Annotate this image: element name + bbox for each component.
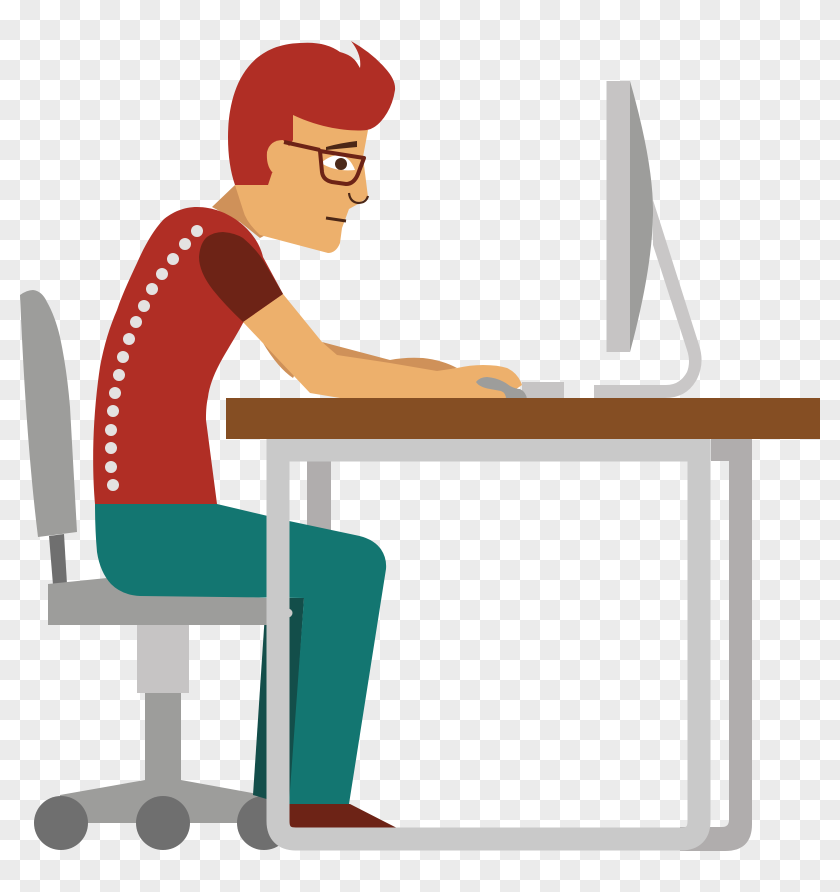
- monitor back: [630, 81, 653, 352]
- spine dots: [105, 225, 203, 491]
- back leg in shadow: [253, 598, 304, 806]
- chair column upper: [137, 625, 189, 693]
- mouth: [326, 218, 346, 221]
- chair seat: [48, 578, 267, 625]
- pupil: [335, 158, 347, 170]
- chair backrest post: [49, 534, 67, 585]
- chair backrest: [20, 290, 77, 537]
- trousers: [95, 504, 386, 804]
- near arm and hand: [243, 294, 522, 399]
- head: [228, 41, 395, 253]
- nose line: [349, 193, 368, 203]
- chair wheels: [34, 796, 291, 850]
- desk front frame: [266, 439, 710, 839]
- sleeve: [199, 232, 283, 322]
- computer monitor: [594, 81, 702, 398]
- desk back frame: [307, 439, 752, 851]
- far arm: [263, 342, 457, 378]
- monitor stand: [594, 200, 702, 398]
- computer mouse: [476, 377, 527, 399]
- desk top: [226, 398, 820, 439]
- eye: [321, 155, 355, 170]
- shirt with spine: [93, 207, 283, 504]
- ear: [267, 140, 293, 172]
- office chair: [20, 290, 291, 850]
- glasses: [284, 142, 364, 184]
- eyebrow: [326, 141, 357, 150]
- neck: [212, 185, 275, 238]
- face: [235, 115, 368, 253]
- monitor front: [606, 81, 630, 352]
- shoe: [282, 804, 397, 828]
- chair star base: [60, 780, 263, 823]
- red shirt: [93, 207, 283, 504]
- keyboard: [522, 382, 564, 399]
- chair column lower: [145, 693, 181, 783]
- hair: [228, 41, 395, 185]
